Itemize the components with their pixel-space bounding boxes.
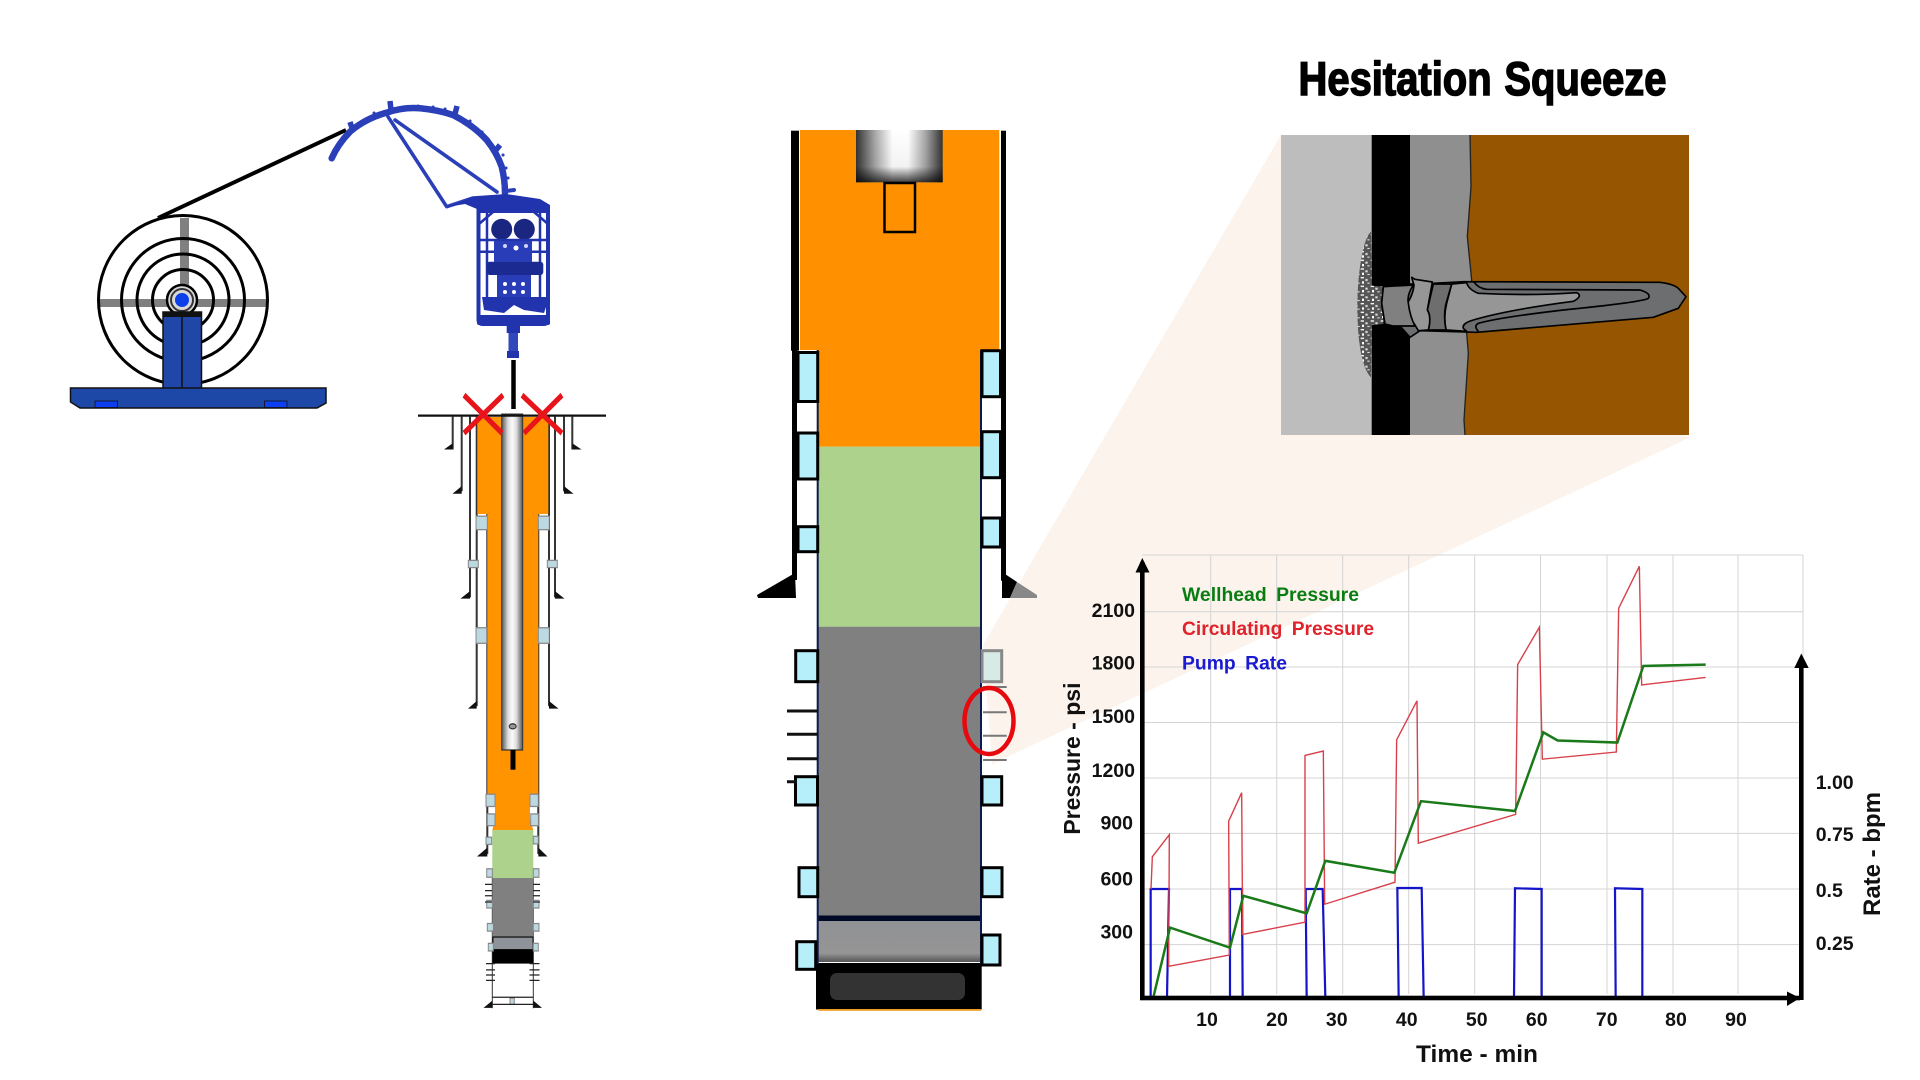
tubing into well — [511, 360, 516, 409]
casing centralizers — [468, 516, 557, 1004]
reel — [98, 216, 268, 384]
pressure axis tick labels: 1200 — [1092, 760, 1135, 782]
rate axis tick labels: 1.00 — [1816, 772, 1854, 794]
perforation tunnel close-up — [1281, 135, 1689, 435]
filter cake node — [1357, 232, 1383, 377]
formation boundary — [1464, 135, 1472, 435]
outer casing strings — [453, 417, 572, 1008]
ground line — [418, 415, 606, 417]
spacer — [818, 447, 981, 627]
pressure axis tick labels: 1800 — [1092, 653, 1135, 675]
steel casing — [1372, 135, 1410, 435]
legend: Pump Rate — [1182, 654, 1287, 674]
left casing shoe — [757, 573, 796, 598]
time axis tick labels: 80 — [1665, 1009, 1687, 1031]
rate axis title: Rate - bpm — [1859, 792, 1886, 916]
enlarged wellbore detail — [757, 130, 1037, 1011]
well fluid — [800, 130, 999, 447]
rate axis tick labels: 0.5 — [1816, 880, 1843, 902]
plug — [493, 937, 533, 950]
perforation tunnels right — [983, 687, 1007, 760]
legend: Circulating Pressure — [1182, 619, 1374, 640]
legend: Wellhead Pressure — [1182, 585, 1359, 606]
wiper plug top — [818, 918, 981, 962]
pressure and rate chart — [1059, 555, 1886, 1068]
rate axis tick labels — [1816, 772, 1854, 955]
spacer column — [492, 830, 533, 878]
cement column — [492, 878, 533, 937]
pump rate series — [1151, 888, 1642, 997]
coiled tubing in well — [502, 414, 523, 770]
pressure axis tick labels: 300 — [1100, 921, 1133, 943]
right casing shoe — [1002, 572, 1037, 598]
pressure axis tick labels — [1092, 600, 1135, 943]
pressure axis title: Pressure - psi — [1059, 683, 1085, 835]
time axis tick labels: 60 — [1526, 1009, 1548, 1031]
time axis tick labels: 90 — [1725, 1009, 1747, 1031]
time axis tick labels: 70 — [1596, 1009, 1618, 1031]
time axis tick labels: 50 — [1466, 1009, 1488, 1031]
pressure axis tick labels: 900 — [1100, 813, 1133, 835]
wellhead pressure series — [1153, 665, 1706, 997]
casing shoes — [444, 443, 582, 1008]
reel stand — [163, 312, 202, 389]
red circle callout — [964, 688, 1014, 754]
cement sheath — [1410, 135, 1472, 435]
time axis tick labels: 30 — [1326, 1009, 1348, 1031]
time axis tick labels: 10 — [1196, 1009, 1218, 1031]
title: Hesitation Squeeze — [1298, 52, 1666, 105]
beige zoom wedge — [983, 135, 1689, 765]
perforations — [485, 884, 540, 1004]
legend — [1182, 585, 1374, 674]
cyan centralizer blocks — [796, 351, 1002, 969]
grid — [1142, 555, 1803, 994]
well fluid column — [477, 417, 548, 830]
red X right valve — [522, 395, 562, 433]
red X left valve — [464, 395, 503, 433]
rate axis tick labels: 0.25 — [1816, 933, 1854, 955]
brown formation — [1464, 135, 1689, 435]
inner casing lines — [818, 350, 981, 964]
casing walls — [791, 131, 1006, 581]
circulating pressure series — [1151, 566, 1706, 966]
pressure axis tick labels: 2100 — [1092, 600, 1135, 622]
time axis title: Time - min — [1416, 1041, 1538, 1068]
cement — [818, 627, 981, 917]
perforation tunnels left — [787, 711, 818, 782]
gooseneck — [332, 101, 514, 207]
pressure axis tick labels: 1500 — [1092, 706, 1135, 728]
time axis tick labels — [1196, 1009, 1747, 1031]
skid base — [70, 388, 326, 408]
cable from reel to gooseneck — [158, 130, 346, 218]
pressure axis tick labels: 600 — [1100, 868, 1133, 890]
axes — [1136, 558, 1809, 1006]
tunnel — [1382, 277, 1686, 337]
rate axis tick labels: 0.75 — [1816, 824, 1854, 846]
injector head — [447, 194, 550, 358]
wellbore overview schematic — [418, 395, 606, 1008]
time axis tick labels: 40 — [1396, 1009, 1418, 1031]
time axis tick labels: 20 — [1266, 1009, 1288, 1031]
coiled tubing end — [856, 130, 943, 232]
plug base — [816, 963, 982, 1011]
coiled tubing unit — [70, 101, 550, 409]
